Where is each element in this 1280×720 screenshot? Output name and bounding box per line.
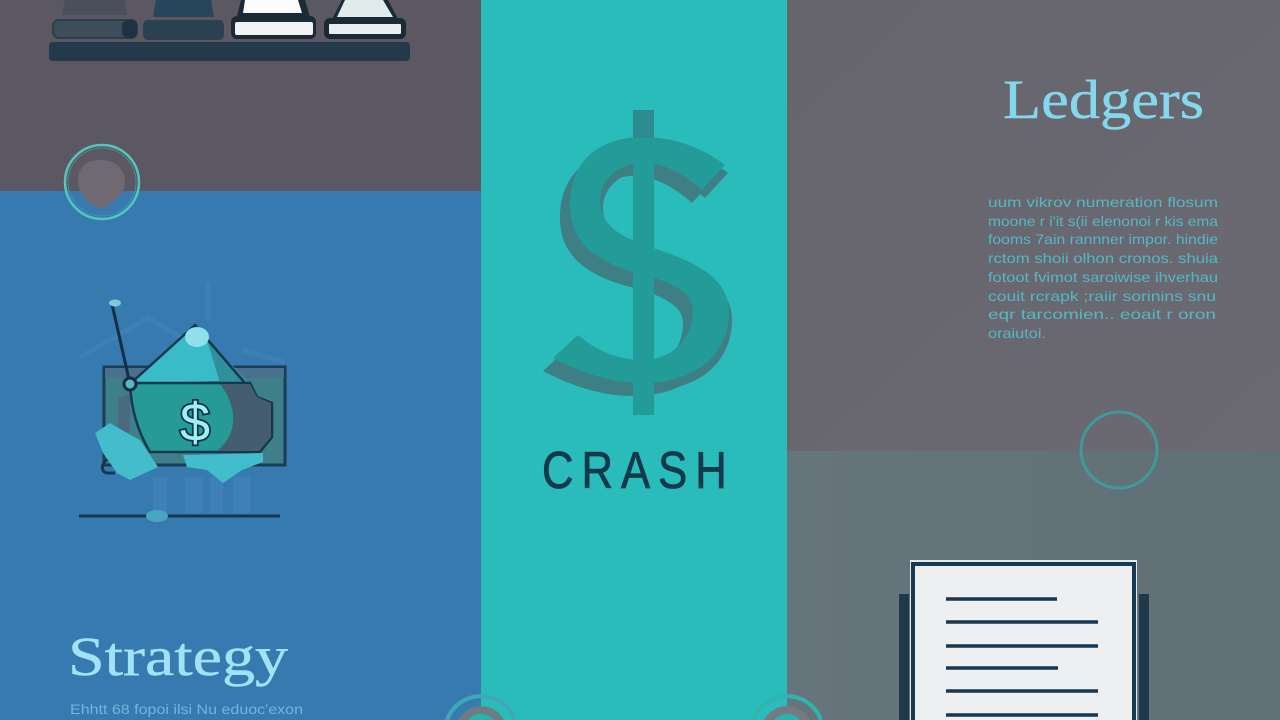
text block: ledgers body: moone r i'it s(ii elenonoi r kis ema (988, 213, 1218, 229)
panel: crash (481, 0, 787, 720)
panel: top-left chess pieces (0, 0, 481, 191)
panel: document (787, 451, 1280, 720)
text block: ledgers body: eqr tarcomien.. eoait r oron (988, 306, 1216, 322)
text block: ledgers body: rctom shoii olhon cronos. shuia (988, 250, 1218, 266)
text block: ledgers body: couit rcrapk ;raiir sorinins snu (988, 288, 1216, 304)
panel: strategy (0, 191, 481, 720)
icon: ledger document (899, 560, 1149, 720)
marker: circle on top-left boundary (65, 145, 139, 219)
marker: bottom circle left of crash column (447, 696, 515, 720)
text block: ledgers body: uum vikrov numeration flosum (988, 194, 1218, 210)
marker: bottom circle right of crash column (753, 696, 821, 720)
text block: ledgers body: oraiutoi. (988, 325, 1046, 341)
dollar symbol on the note: $ (180, 393, 210, 453)
icon: money and bank illustration (79, 282, 285, 522)
text block: ledgers body: fotoot fvimot saroiwise ihverhau (988, 269, 1218, 285)
text block: strategy caption: Ehhtt 68 fopoi ilsi Nu eduoc'exon (70, 701, 303, 717)
icon: large dollar sign (543, 110, 732, 415)
text block: ledgers body: fooms 7ain rannner impor. hindie (988, 231, 1218, 247)
marker: circle on right boundary (1081, 412, 1157, 488)
panel: ledgers (787, 0, 1280, 451)
heading: CRASH: CRASH (542, 443, 727, 500)
heading: Ledgers: Ledgers (1003, 69, 1204, 130)
heading: Strategy: Strategy (68, 626, 289, 687)
text block: ledgers body (988, 194, 1218, 341)
icon: chess pieces on shelf (49, 0, 410, 61)
